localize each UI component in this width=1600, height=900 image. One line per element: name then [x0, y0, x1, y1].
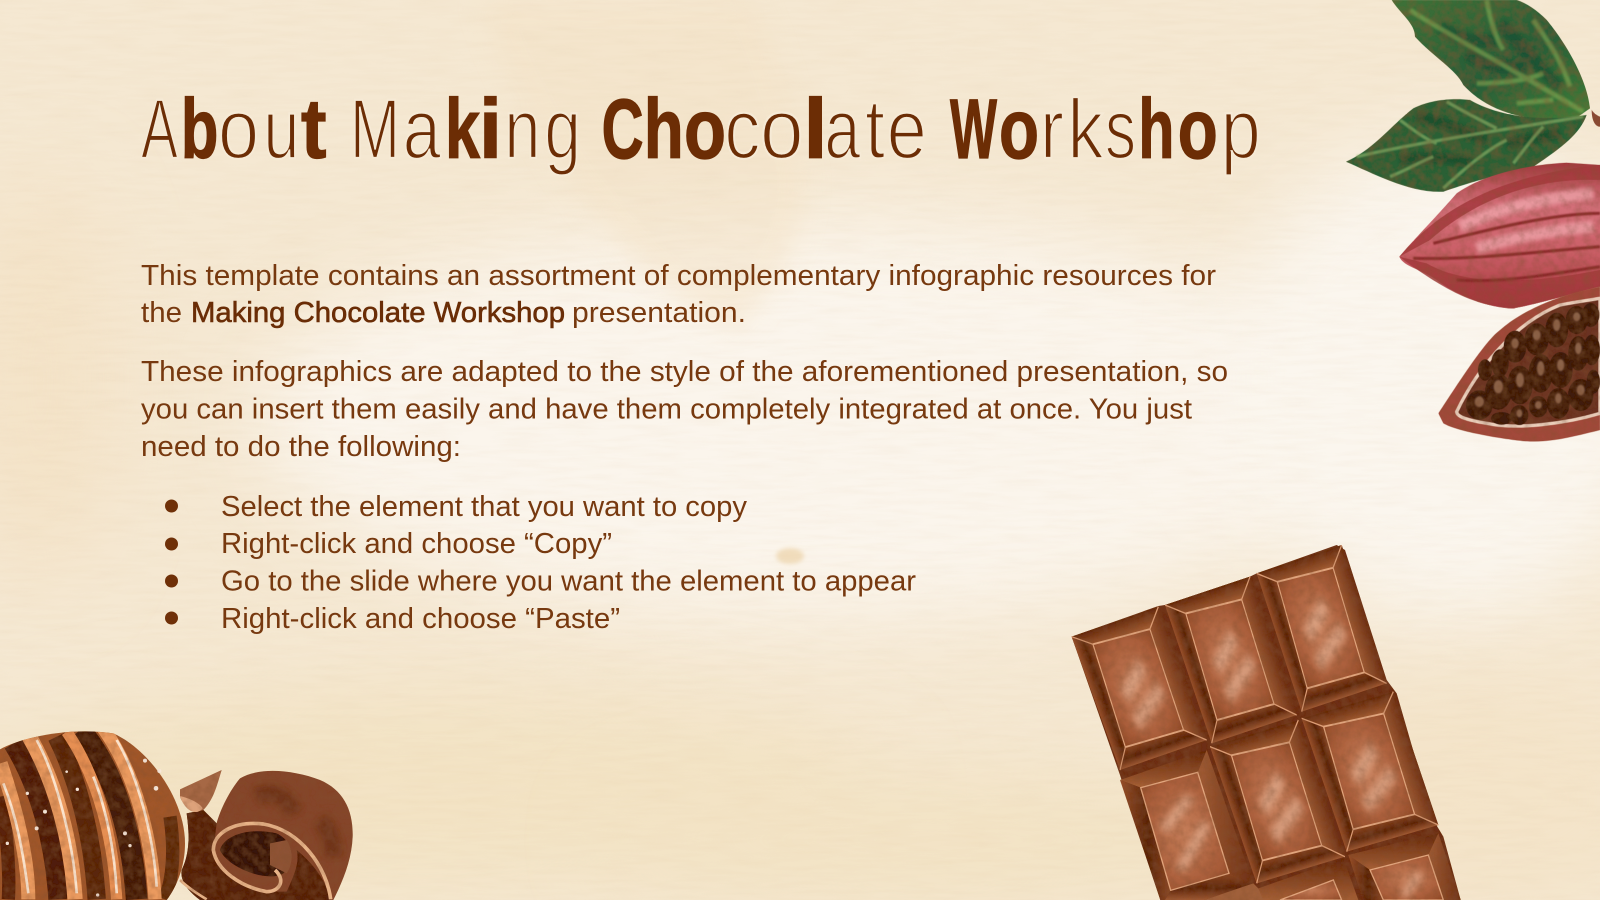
title: o	[684, 82, 726, 176]
title: M	[350, 82, 400, 176]
title: n	[504, 82, 540, 176]
illustration: cocoa leaves and pods	[1346, 0, 1600, 442]
title: o	[760, 82, 804, 176]
title: a	[824, 82, 861, 176]
title: o	[1178, 82, 1218, 176]
title: p	[1221, 82, 1261, 176]
curl pale ribbon	[213, 823, 331, 899]
pieces: third row, cut by the page edge	[1204, 833, 1461, 900]
second paragraph	[141, 356, 1228, 463]
intro paragraph: This template contains an assortment of complementary infographic resources for	[141, 260, 1216, 292]
curl shading	[257, 794, 333, 857]
pod stem	[1592, 110, 1600, 127]
bullet list: Right-click and choose “Copy”	[221, 528, 612, 560]
title: k	[445, 82, 480, 176]
title: e	[887, 82, 927, 176]
title: b	[181, 82, 218, 176]
truffle sprinkles	[6, 759, 161, 897]
intro paragraph: Making Chocolate Workshop	[191, 297, 565, 329]
truffle body	[0, 731, 185, 900]
title: t	[865, 82, 885, 176]
intro paragraph: the	[141, 297, 182, 329]
second paragraph: These infographics are adapted to the style of the aforementioned presentation, so	[141, 356, 1228, 388]
bullet list: Go to the slide where you want the element to appear	[221, 566, 916, 598]
title: h	[644, 82, 684, 176]
title: h	[1138, 82, 1174, 176]
second paragraph: need to do the following:	[141, 431, 461, 463]
title: s	[1105, 82, 1136, 176]
title: u	[263, 82, 299, 176]
title: A	[141, 82, 178, 176]
title: g	[544, 82, 581, 176]
leaf: upper	[1392, 0, 1590, 120]
intro paragraph: presentation.	[572, 297, 746, 329]
title: k	[1068, 82, 1104, 176]
illustration: striped truffle	[0, 728, 185, 900]
title: W	[950, 82, 997, 176]
title: o	[218, 82, 259, 176]
bullet list: Select the element that you want to copy	[221, 491, 748, 523]
cocoa pod: open with beans	[1438, 287, 1600, 442]
title: t	[301, 82, 326, 176]
bullet list: Right-click and choose “Paste”	[221, 603, 620, 635]
piece: second row left, cut by the page edge	[1120, 750, 1253, 900]
illustration: chocolate curl	[180, 770, 353, 900]
title: a	[403, 82, 441, 176]
second paragraph: you can insert them easily and have them completely integrated at once. You just	[141, 394, 1192, 426]
curl hollow	[220, 831, 291, 876]
truffle stripes	[0, 728, 173, 899]
bar base	[1072, 545, 1461, 900]
curl outer body	[181, 771, 353, 900]
title: o	[999, 82, 1039, 176]
illustration: chocolate bar	[1072, 545, 1461, 900]
leaf: lower	[1346, 99, 1587, 192]
title	[141, 82, 1261, 176]
intro paragraph	[141, 260, 1216, 329]
bullet list	[165, 491, 916, 635]
cocoa pod: red	[1399, 163, 1600, 308]
curl tail	[180, 770, 222, 811]
chocolate pieces	[1072, 545, 1438, 883]
title: C	[602, 82, 644, 176]
title: i	[479, 82, 502, 176]
title: r	[1040, 82, 1064, 176]
title: c	[724, 82, 760, 176]
curl lower shadow	[181, 810, 331, 900]
title: l	[804, 82, 828, 176]
